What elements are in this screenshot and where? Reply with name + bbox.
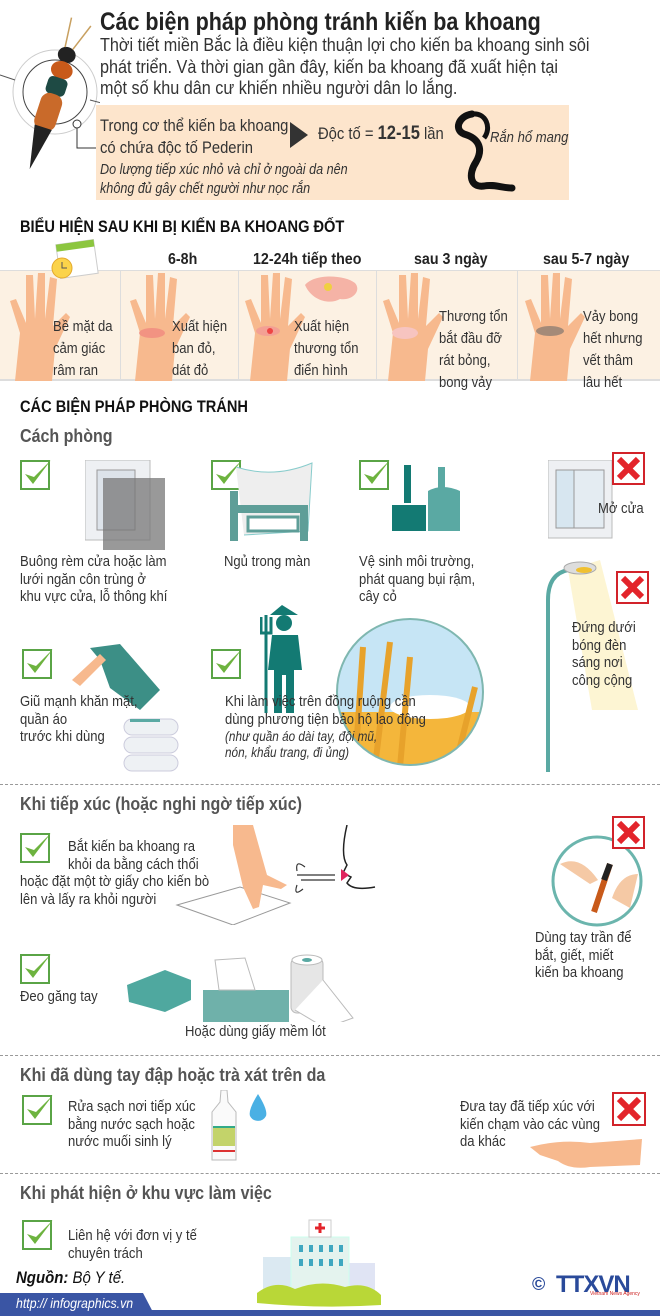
title: Các biện pháp phòng tránh kiến ba khoang <box>100 8 541 36</box>
time labels: sau 3 ngày <box>414 251 488 268</box>
panel: symptom timeline: bắt đầu đỡ <box>439 330 502 347</box>
caption: Đứng dưới <box>572 619 636 636</box>
logo: TTXVN: TTXVN <box>556 1271 630 1298</box>
icon: cobra <box>454 110 516 192</box>
item: blow off: lên và lấy ra khỏi người <box>20 890 156 908</box>
caption: bóng đèn <box>572 636 626 654</box>
panel: symptom timeline: điển hình <box>294 362 348 379</box>
time labels: 6-8h <box>168 251 197 268</box>
item: window screen <box>20 460 168 605</box>
item: contact health unit <box>0 1215 240 1270</box>
caption: Mở cửa <box>598 500 644 517</box>
caption <box>20 693 138 745</box>
footer bar <box>0 1293 660 1316</box>
text: cobra label: Rắn hổ mang <box>490 129 568 146</box>
caption: Bắt kiến ba khoang ra <box>68 838 195 855</box>
subheading: cách phòng: Cách phòng <box>20 426 113 446</box>
panel: symptom timeline: Thương tổn <box>439 308 508 325</box>
icon: checkbox <box>22 649 53 679</box>
panel: symptom timeline: dát đỏ <box>172 362 208 379</box>
item: street lamp (don't) <box>546 560 649 772</box>
icon: hospital <box>255 1218 385 1310</box>
item: field work protection <box>211 605 484 766</box>
item: wash <box>0 1090 280 1165</box>
arrow <box>290 122 308 148</box>
caption: dùng phương tiện bảo hộ lao động <box>225 710 426 728</box>
caption: lưới ngăn côn trùng ở <box>20 570 146 588</box>
icon: window <box>85 460 165 550</box>
icon: checkbox <box>211 460 242 490</box>
caption: da khác <box>460 1133 506 1150</box>
panel: symptom timeline: rát bỏng, <box>439 352 491 369</box>
caption: Dùng tay trần để <box>535 929 631 946</box>
caption: Đeo găng tay <box>20 988 98 1005</box>
caption: chuyên trách <box>68 1244 143 1262</box>
icon: checkbox <box>359 460 390 490</box>
icon: checkbox <box>20 460 51 490</box>
icon: checkbox <box>20 833 51 863</box>
caption: phát quang bụi rậm, <box>359 570 475 588</box>
caption: Ngủ trong màn <box>224 553 310 570</box>
item: field work protection: (như quần áo dài tay, đội mũ, <box>225 729 377 744</box>
captions: râm ran <box>53 362 98 379</box>
captions: Bề mặt da <box>53 318 112 335</box>
icon: checkbox <box>211 649 242 679</box>
caption: Đưa tay đã tiếp xúc với <box>460 1098 595 1115</box>
intro text <box>100 34 590 98</box>
text: toxin ratio: Độc tố = 12-15 lần <box>318 123 444 144</box>
icon: bed <box>230 462 312 541</box>
panel: symptom timeline: ban đỏ, <box>172 340 216 357</box>
icon: hands <box>10 273 585 381</box>
panel: symptom timeline: vết thâm <box>583 352 633 369</box>
time labels: 12-24h tiếp theo <box>253 251 361 268</box>
icon: wheat circle <box>336 618 484 766</box>
caption: Rửa sạch nơi tiếp xúc <box>68 1098 196 1115</box>
time labels <box>168 251 630 268</box>
time labels: sau 5-7 ngày <box>543 251 629 268</box>
icon: red x <box>616 571 649 604</box>
caption: khỏi da bằng cách thổi <box>68 856 199 872</box>
text: bong vảy <box>439 374 492 391</box>
caption: nước muối sinh lý <box>68 1133 172 1150</box>
panel: symptom timeline: thương tổn <box>294 340 358 357</box>
caption: bắt, giết, miết <box>535 946 613 964</box>
intro text: phát triển. Và thời gian gần đây, kiến ba khoang đã xuất hiện tại <box>100 56 558 76</box>
icon: gloves, tissue box, roll <box>125 950 355 1022</box>
caption <box>68 838 199 872</box>
logo: TTXVN: © <box>532 1274 545 1294</box>
panel: toxin callout <box>96 105 569 200</box>
intro text: Thời tiết miền Bắc là điều kiện thuận lợi cho kiến ba khoang sinh sôi <box>100 35 590 55</box>
item: touching other skin (don't) <box>455 1090 650 1170</box>
text: lâu hết <box>583 374 622 391</box>
panel: symptom timeline: hết nhưng <box>583 330 643 347</box>
caption: Liên hệ với đơn vị y tế <box>68 1227 197 1244</box>
caption <box>68 1227 197 1262</box>
icon: red x <box>612 816 645 849</box>
text: note: không đủ gây chết người như nọc rắn <box>100 181 310 197</box>
caption <box>68 1098 196 1150</box>
captions: cảm giác <box>53 340 105 357</box>
caption <box>460 1098 600 1150</box>
text: pederin <box>100 116 288 157</box>
item: gloves <box>0 945 360 1040</box>
caption <box>20 553 168 605</box>
icon: saline bottle <box>208 1090 240 1164</box>
item: blow off: hoặc đặt một tờ giấy cho kiến bò <box>20 873 209 890</box>
caption: khu vực cửa, lỗ thông khí <box>20 588 167 605</box>
text: pederin: Trong cơ thể kiến ba khoang <box>100 116 288 135</box>
panel: symptom timeline: Xuất hiện <box>172 318 227 335</box>
caption: kiến ba khoang <box>535 964 624 981</box>
captions <box>53 318 112 379</box>
footer url: http:// infographics.vn <box>16 1295 133 1311</box>
icon: lamp post <box>546 560 638 772</box>
subheading: crushed on skin: Khi đã dùng tay đập hoặc trà xát trên da <box>20 1065 325 1085</box>
caption: kiến chạm vào các vùng <box>460 1116 600 1132</box>
icon: rove beetle <box>0 18 100 169</box>
caption <box>225 693 426 728</box>
caption: Khi làm việc trên đồng ruộng cần <box>225 693 416 710</box>
logo: TTXVN: Vietnam News Agency <box>590 1291 640 1297</box>
item: blow off <box>20 825 376 925</box>
icon: pointing hand <box>530 1135 645 1170</box>
icon: red x <box>612 452 645 485</box>
item: open window (don't) <box>548 452 645 538</box>
caption: bằng nước sạch hoặc <box>68 1116 195 1132</box>
logo: TTXVN <box>532 1274 647 1298</box>
item: field work protection: nón, khẩu trang, đi ủng) <box>225 745 349 760</box>
source: Nguồn: Bộ Y tế. <box>16 1268 125 1287</box>
icon: broom <box>392 465 460 531</box>
panel: symptom timeline <box>0 270 660 381</box>
icon: calendar clock <box>52 239 99 279</box>
item: shake towels <box>20 644 178 772</box>
icon: red x <box>612 1092 646 1126</box>
caption: sáng nơi <box>572 654 623 671</box>
icon: checkbox <box>22 1218 54 1250</box>
caption: Buông rèm cửa hoặc làm <box>20 553 167 570</box>
text: pederin: có chứa độc tố Pederin <box>100 138 253 157</box>
icon: pinching circle <box>550 834 645 929</box>
caption: Vệ sinh môi trường, <box>359 553 474 570</box>
icon: water drop <box>248 1094 268 1124</box>
caption: Hoặc dùng giấy mềm lót <box>185 1023 326 1040</box>
heading: prevention: CÁC BIỆN PHÁP PHÒNG TRÁNH <box>20 397 248 416</box>
heading: symptoms: BIỂU HIỆN SAU KHI BỊ KIẾN BA KHOANG ĐỐT <box>20 217 344 236</box>
text: note: Do lượng tiếp xúc nhỏ và chỉ ở ngoài da nên <box>100 162 348 178</box>
item: cleaning <box>359 460 475 605</box>
intro text: một số khu dân cư khiến nhiều người dân lo lắng. <box>100 78 457 98</box>
icon: hand on paper and blowing face <box>176 825 376 925</box>
subheading: contact: Khi tiếp xúc (hoặc nghi ngờ tiếp xúc) <box>20 794 302 814</box>
item: mosquito net <box>211 460 312 570</box>
caption <box>572 619 636 688</box>
icon: window <box>548 460 612 538</box>
caption: cây cỏ <box>359 588 397 605</box>
item: bare hands (don't) <box>530 814 660 984</box>
caption: công cộng <box>572 672 632 688</box>
panel: symptom timeline: Xuất hiện <box>294 318 349 335</box>
caption: trước khi dùng <box>20 728 105 745</box>
caption: Giũ mạnh khăn mặt, <box>20 693 138 710</box>
text: note <box>100 162 348 197</box>
panel: symptom timeline: Vảy bong <box>583 308 638 325</box>
icon: towel stack <box>124 718 178 772</box>
icon: checkbox <box>20 952 52 984</box>
caption: quần áo <box>20 710 67 728</box>
icon: cloth <box>72 644 160 710</box>
icon: checkbox <box>22 1093 54 1125</box>
caption <box>535 929 631 982</box>
subheading: at workplace: Khi phát hiện ở khu vực làm việc <box>20 1183 272 1203</box>
icon: farmer <box>260 605 302 713</box>
caption <box>359 553 475 605</box>
